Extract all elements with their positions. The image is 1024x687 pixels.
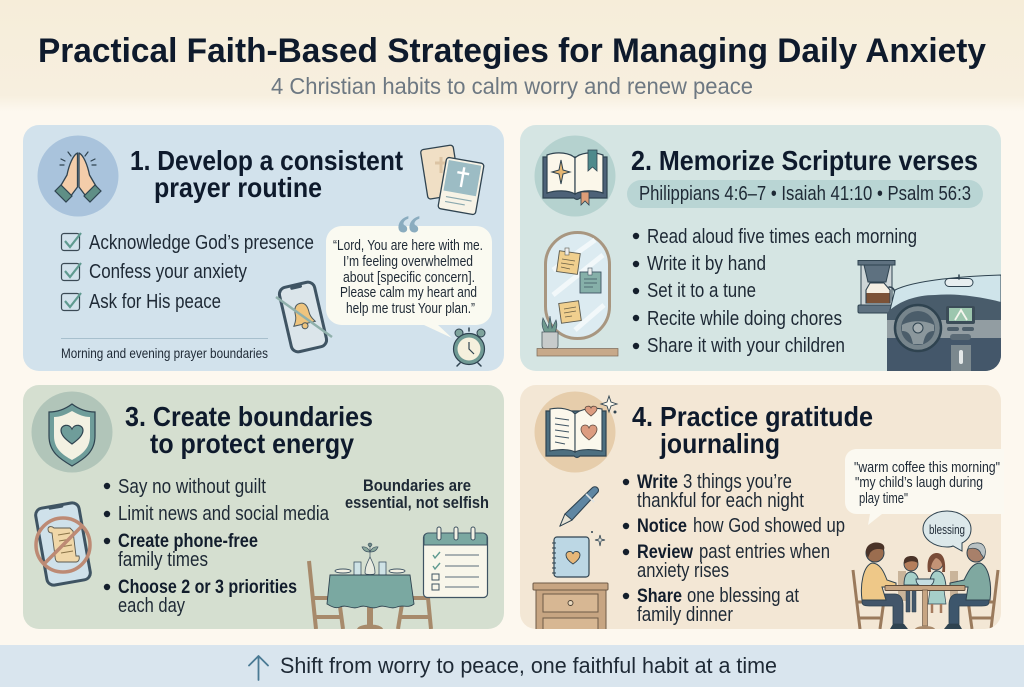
- callout: boundaries are essential: [345, 476, 489, 512]
- bullet list 4: thankful for each night: [637, 490, 804, 512]
- icon: dinner table: [309, 543, 431, 629]
- heading 1: [130, 145, 403, 203]
- bullet list 3: Choose 2 or 3 priorities: [118, 576, 297, 598]
- callout: blessing bubble: [923, 511, 971, 551]
- icon: prayer cards: [420, 145, 484, 215]
- footer message: Shift from worry to peace, one faithful habit at a time: [280, 653, 777, 678]
- heading 1: prayer routine: [154, 172, 322, 203]
- icon: open bible: [534, 136, 616, 216]
- heading 3: [125, 401, 373, 459]
- bullet list 2: [633, 226, 917, 357]
- callout: prayer quote: help me trust Your plan.”: [346, 301, 475, 317]
- bullet list 2: Share it with your children: [647, 335, 845, 357]
- bullet list 3: family times: [118, 549, 208, 571]
- verse references pill: [627, 180, 983, 208]
- callout: gratitude examples: "my child’s laugh during: [855, 475, 983, 491]
- title: Practical Faith-Based Strategies for Managing Daily Anxiety: [38, 32, 986, 70]
- bullet list 3: Create phone-free: [118, 530, 258, 552]
- bullet list 4: one blessing at: [687, 585, 799, 607]
- callout: gratitude examples: [845, 449, 1004, 525]
- heading 4: journaling: [659, 428, 780, 459]
- bullet list 3: Limit news and social media: [118, 503, 330, 525]
- icon: alarm clock: [454, 328, 485, 366]
- icon: up arrow: [249, 656, 268, 680]
- callout: prayer quote: Please calm my heart and: [340, 285, 477, 301]
- icon: silenced phone: [276, 281, 332, 353]
- checklist: Acknowledge God’s presence: [89, 232, 314, 254]
- heading 3: 3. Create boundaries: [125, 401, 373, 432]
- bullet list 2: Set it to a tune: [647, 280, 756, 302]
- bullet list 4: [623, 471, 845, 626]
- panel: 2 memorize scripture: [520, 125, 1001, 371]
- bullet list 4: Share: [637, 585, 682, 607]
- icon: mirror with notes: [537, 232, 618, 356]
- subtitle: 4 Christian habits to calm worry and renew peace: [271, 73, 753, 99]
- callout: prayer quote: [326, 204, 492, 338]
- callout: prayer quote: “Lord, You are here with me.: [333, 238, 483, 254]
- bullet list 3: Say no without guilt: [118, 476, 266, 498]
- bullet list 2: Recite while doing chores: [647, 308, 842, 330]
- footer banner: [0, 645, 1024, 687]
- callout: prayer quote: about [specific concern].: [343, 270, 475, 286]
- bullet list 4: past entries when: [699, 541, 830, 563]
- bullet list 4: Review: [637, 541, 694, 563]
- illustration: family at table: [853, 542, 998, 629]
- bullet list 4: how God showed up: [693, 515, 845, 537]
- icon: gratitude journal: [534, 392, 617, 472]
- heading 3: to protect energy: [150, 428, 354, 459]
- callout: boundaries are essential: Boundaries are: [363, 476, 471, 495]
- icon: phone with no scroll: [35, 502, 91, 586]
- icon: shield with heart: [32, 392, 112, 472]
- bullet list 4: anxiety rises: [637, 560, 729, 582]
- callout: gratitude examples: play time": [859, 491, 908, 507]
- heading 4: 4. Practice gratitude: [632, 401, 873, 432]
- bullet list 4: Notice: [637, 515, 687, 537]
- bullet list 2: Read aloud five times each morning: [647, 226, 917, 248]
- callout: prayer quote: I’m feeling overwhelmed: [343, 254, 473, 270]
- icon: checklist calendar: [424, 527, 488, 598]
- checklist: Confess your anxiety: [89, 261, 247, 283]
- checklist: [62, 232, 314, 313]
- panel: 3 boundaries: [23, 385, 504, 629]
- icon: notebook: [552, 531, 605, 577]
- checklist: Ask for His peace: [89, 291, 221, 313]
- icon: coffee maker: [858, 260, 895, 313]
- heading 2: 2. Memorize Scripture verses: [631, 145, 978, 176]
- heading 4: [632, 401, 873, 459]
- icon: car dashboard: [887, 275, 1001, 371]
- icon: pen: [560, 487, 598, 526]
- callout: prayer quote: “: [396, 204, 421, 264]
- bullet list 4: Write: [637, 471, 678, 493]
- note: prayer boundaries: Morning and evening prayer boundaries: [61, 345, 268, 361]
- callout: gratitude examples: "warm coffee this morning": [854, 460, 1000, 476]
- callout: boundaries are essential: essential, not selfish: [345, 493, 489, 512]
- panel: 4 gratitude journaling: [520, 385, 1004, 635]
- panel: 1 prayer routine: [23, 125, 504, 371]
- bullet list 3: each day: [118, 595, 185, 617]
- icon: praying hands: [38, 136, 118, 216]
- bullet list 4: family dinner: [637, 604, 733, 626]
- bullet list 4: 3 things you’re: [683, 471, 792, 493]
- callout: blessing bubble: blessing: [929, 523, 965, 537]
- bullet list 2: Write it by hand: [647, 253, 766, 275]
- icon: nightstand: [533, 583, 608, 635]
- bullet list 3: [104, 476, 330, 617]
- heading 1: 1. Develop a consistent: [130, 145, 403, 176]
